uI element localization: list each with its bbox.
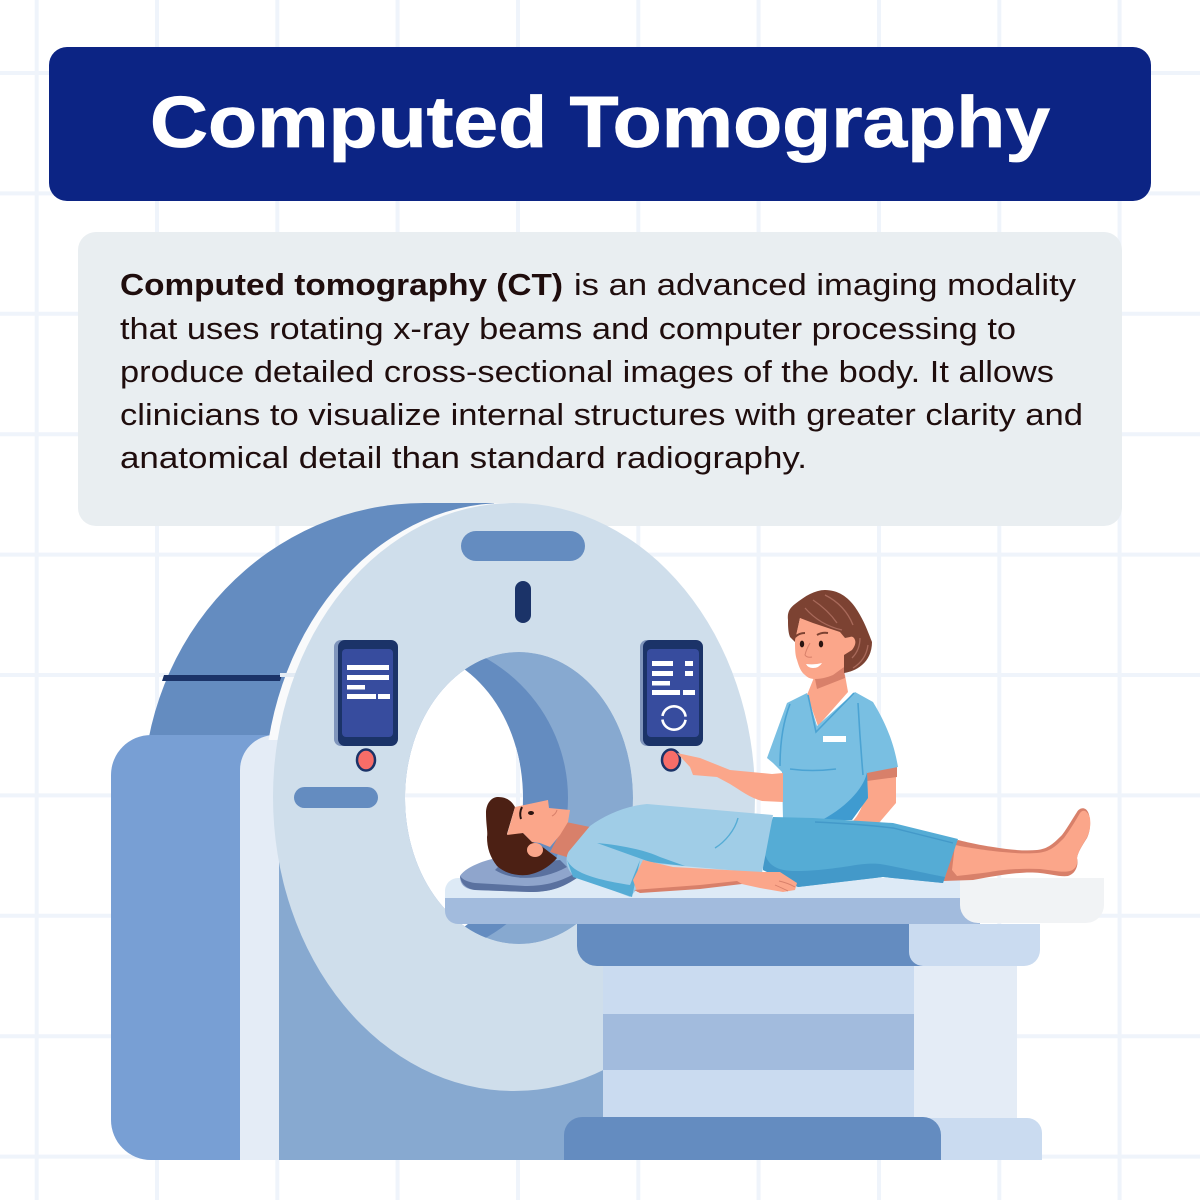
right button (662, 750, 680, 770)
panel: definition text: anatomical detail than standard radiography. (120, 440, 807, 475)
patient trousers (762, 817, 958, 887)
nurse hair (788, 590, 872, 673)
nurse name badge (823, 736, 846, 742)
right screen (640, 640, 703, 746)
left button (357, 750, 375, 770)
patient shirt fold (715, 818, 738, 848)
nurse scrubs (767, 692, 898, 820)
scanner side band (240, 735, 300, 1160)
nurse scrubs shading (822, 772, 868, 820)
nurse pointing arm (677, 753, 783, 802)
panel: definition text: is an advanced imaging modality (574, 267, 1077, 302)
pillow (460, 859, 577, 892)
nurse neck shadow (815, 667, 845, 689)
nurse hair strands (805, 595, 868, 668)
title (49, 47, 1151, 201)
panel: definition text: clinicians to visualize internal structures with greater clarity and (120, 397, 1083, 432)
patient neck (550, 822, 590, 858)
patient ear (527, 843, 543, 857)
nurse far arm (850, 772, 896, 824)
nurse eyes, nose and smile (795, 633, 828, 668)
gantry disc (273, 503, 755, 1091)
patient hair (486, 797, 557, 875)
patient eye and brow (520, 807, 557, 819)
scanner back arc (149, 503, 494, 736)
patient shirt (567, 804, 773, 897)
top indicator (515, 581, 531, 623)
CT scanner illustration (111, 503, 1104, 1160)
bed base stack (564, 924, 1042, 1160)
scanner lower body (279, 790, 609, 1160)
patient leg shadow (943, 808, 1090, 881)
patient leg (952, 811, 1090, 876)
bed mattress and table (445, 878, 1104, 924)
patient face (507, 800, 570, 847)
panel: definition text: that uses rotating x-ray beams and computer processing to (120, 311, 1016, 346)
nurse v-neck trim (780, 693, 863, 775)
panel: definition text (78, 232, 1122, 526)
top pill (461, 531, 585, 561)
scanner base block (111, 735, 280, 1160)
title: Computed Tomography (150, 83, 1050, 163)
patient (486, 797, 1090, 897)
nurse (677, 590, 898, 824)
left screen (334, 640, 398, 746)
nurse face (795, 618, 855, 679)
panel: definition text: Computed tomography (CT) (120, 267, 563, 302)
white rim of gantry (268, 503, 506, 740)
patient sleeve trim (567, 860, 640, 897)
gantry bore (405, 652, 633, 944)
left pill (294, 787, 378, 808)
panel: definition text: produce detailed cross-sectional images of the body. It allows (120, 354, 1054, 389)
patient arm (633, 860, 797, 892)
nurse neck (807, 675, 848, 726)
